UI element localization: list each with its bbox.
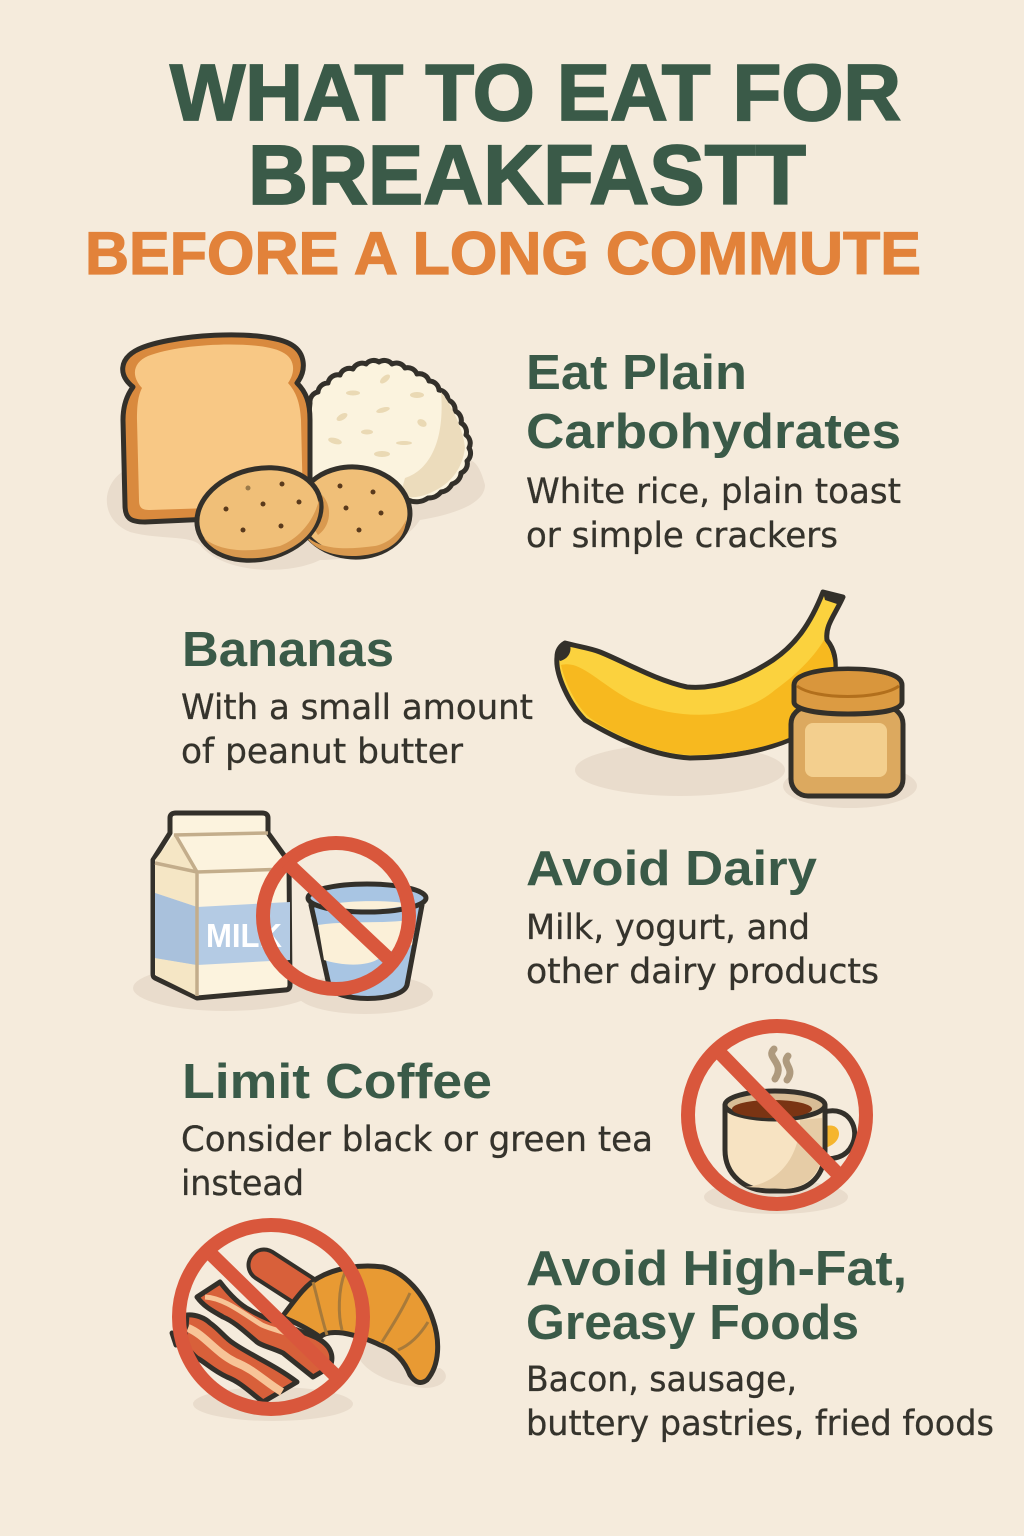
icon: no greasy foods <box>172 1225 446 1421</box>
sausage <box>264 1265 312 1296</box>
text: limit coffee: instead <box>181 1164 304 1204</box>
text: eat plain carbohydrates <box>526 346 901 556</box>
text: limit coffee: Limit Coffee <box>182 1055 492 1109</box>
text: bananas: With a small amount <box>181 688 533 728</box>
title: BREAKFASTT <box>248 128 806 222</box>
peanut butter jar <box>791 669 903 796</box>
text: avoid high-fat, greasy foods: Greasy Foods <box>526 1296 859 1350</box>
bacon strips <box>172 1282 332 1402</box>
rice ball <box>300 360 471 502</box>
bread slice <box>123 335 310 522</box>
croissant <box>282 1266 438 1382</box>
steam <box>772 1049 790 1080</box>
text: eat plain carbohydrates: Carbohydrates <box>526 405 901 459</box>
icon: no coffee <box>688 1026 866 1214</box>
title: BEFORE A LONG COMMUTE <box>85 220 921 287</box>
text: eat plain carbohydrates: White rice, plain toast <box>526 472 901 512</box>
text: bananas: Bananas <box>182 623 394 677</box>
prohibition sign <box>688 1026 866 1204</box>
text: avoid dairy: Milk, yogurt, and <box>526 908 810 948</box>
icon: bread, rice and crackers <box>107 335 485 573</box>
text: bananas <box>181 623 533 772</box>
text: avoid high-fat, greasy foods: Avoid High-Fat, <box>526 1242 907 1296</box>
prohibition sign <box>179 1225 363 1409</box>
yogurt cup <box>308 884 426 998</box>
text: limit coffee <box>181 1055 653 1204</box>
text: avoid high-fat, greasy foods: Bacon, sausage, <box>526 1360 797 1400</box>
title <box>85 48 921 287</box>
banana <box>557 592 843 758</box>
text: avoid high-fat, greasy foods <box>526 1242 994 1444</box>
milk label: MILK <box>206 917 282 954</box>
text: eat plain carbohydrates: Eat Plain <box>526 346 747 400</box>
milk carton <box>153 813 290 998</box>
text: avoid dairy: other dairy products <box>526 952 879 992</box>
text: eat plain carbohydrates: or simple crackers <box>526 516 838 556</box>
icon: no dairy <box>133 813 433 1014</box>
text: avoid high-fat, greasy foods: buttery pastries, fried foods <box>526 1404 994 1444</box>
coffee mug <box>725 1091 855 1191</box>
text: bananas: of peanut butter <box>181 732 464 772</box>
crackers <box>187 455 413 573</box>
icon: banana and peanut butter jar <box>557 592 917 808</box>
text: avoid dairy <box>526 842 879 992</box>
text: limit coffee: Consider black or green tea <box>181 1120 653 1160</box>
text: avoid dairy: Avoid Dairy <box>526 842 817 896</box>
prohibition sign <box>263 843 409 989</box>
title: WHAT TO EAT FOR <box>170 48 901 137</box>
